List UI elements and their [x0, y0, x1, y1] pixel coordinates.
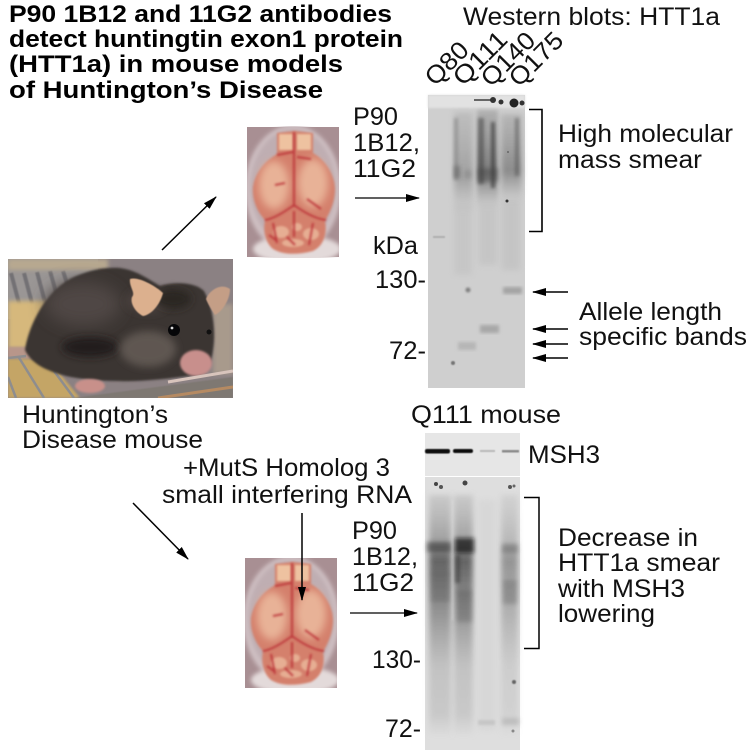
- upper antibody label: 1B12,: [353, 129, 420, 157]
- siRNA label: small interfering RNA: [162, 481, 412, 509]
- lane labels: [419, 25, 569, 92]
- label: allele length specific bands: [579, 298, 747, 351]
- lower western blot: [425, 477, 520, 750]
- arrow: mouse to lower brain: [133, 503, 188, 559]
- label: decrease in smear: with MSH3: [557, 575, 685, 603]
- label: decrease in smear: Decrease in: [558, 524, 698, 552]
- heading: western blots: Western blots: HTT1a: [463, 3, 720, 31]
- upper antibody label: 11G2: [353, 155, 416, 183]
- upper antibody label: [353, 103, 420, 183]
- upper antibody label: P90: [353, 103, 398, 131]
- siRNA label: +MutS Homolog 3: [183, 454, 390, 482]
- label: decrease in smear: lowering: [558, 600, 655, 628]
- lower kDa markers: [372, 646, 421, 743]
- siRNA label: [162, 454, 412, 509]
- upper western blot: [428, 95, 525, 388]
- upper kDa markers: [373, 232, 426, 365]
- lane labels: Q111: [447, 25, 513, 91]
- label: allele length specific bands: Allele length: [579, 298, 722, 326]
- lane labels: Q80: [419, 36, 475, 91]
- lower kDa markers: 72-: [385, 715, 421, 743]
- arrow: upper brain to blot: [355, 197, 419, 199]
- label: decrease in smear: [557, 524, 720, 628]
- label: allele length specific bands: specific bands: [579, 323, 747, 351]
- MSH3 blot: [425, 433, 520, 476]
- label: high molecular mass smear: [558, 120, 733, 174]
- mouse photo: [8, 259, 233, 398]
- upper kDa markers: 72-: [389, 337, 426, 365]
- upper kDa markers: 130-: [375, 266, 426, 294]
- lower antibody label: 1B12,: [352, 543, 418, 571]
- title: of Huntington’s Disease: [9, 77, 323, 104]
- icon: lower brain photo: [243, 556, 339, 694]
- lower kDa markers: 130-: [372, 646, 421, 674]
- lower antibody label: [352, 517, 418, 597]
- lane labels: Q175: [503, 26, 569, 92]
- title: detect huntingtin exon1 protein: [9, 26, 403, 53]
- label: high molecular mass smear: mass smear: [558, 146, 702, 174]
- title: [9, 1, 403, 104]
- label: decrease in smear: HTT1a smear: [558, 549, 720, 577]
- arrow: mouse to upper brain: [162, 197, 216, 250]
- bracket: HTT1a smear: [524, 498, 539, 648]
- lower antibody label: 11G2: [352, 569, 414, 597]
- title: P90 1B12 and 11G2 antibodies: [9, 1, 392, 28]
- arrow: siRNA to brain: [301, 513, 303, 600]
- mouse caption: Huntington’s: [22, 401, 168, 429]
- label: MSH3: MSH3: [528, 441, 600, 469]
- mouse caption: Disease mouse: [22, 426, 203, 454]
- mouse caption: [22, 401, 203, 454]
- icon: upper brain photo: [245, 125, 341, 263]
- arrows: allele length bands: [533, 292, 568, 358]
- arrow: lower brain to blot: [350, 612, 417, 614]
- upper kDa markers: kDa: [373, 232, 418, 260]
- heading: Q111 mouse: Q111 mouse: [411, 401, 561, 429]
- lane labels: Q140: [475, 26, 541, 92]
- label: high molecular mass smear: High molecular: [558, 120, 733, 148]
- bracket: high molecular mass smear: [529, 110, 542, 232]
- lower antibody label: P90: [352, 517, 397, 545]
- title: (HTT1a) in mouse models: [9, 51, 343, 78]
